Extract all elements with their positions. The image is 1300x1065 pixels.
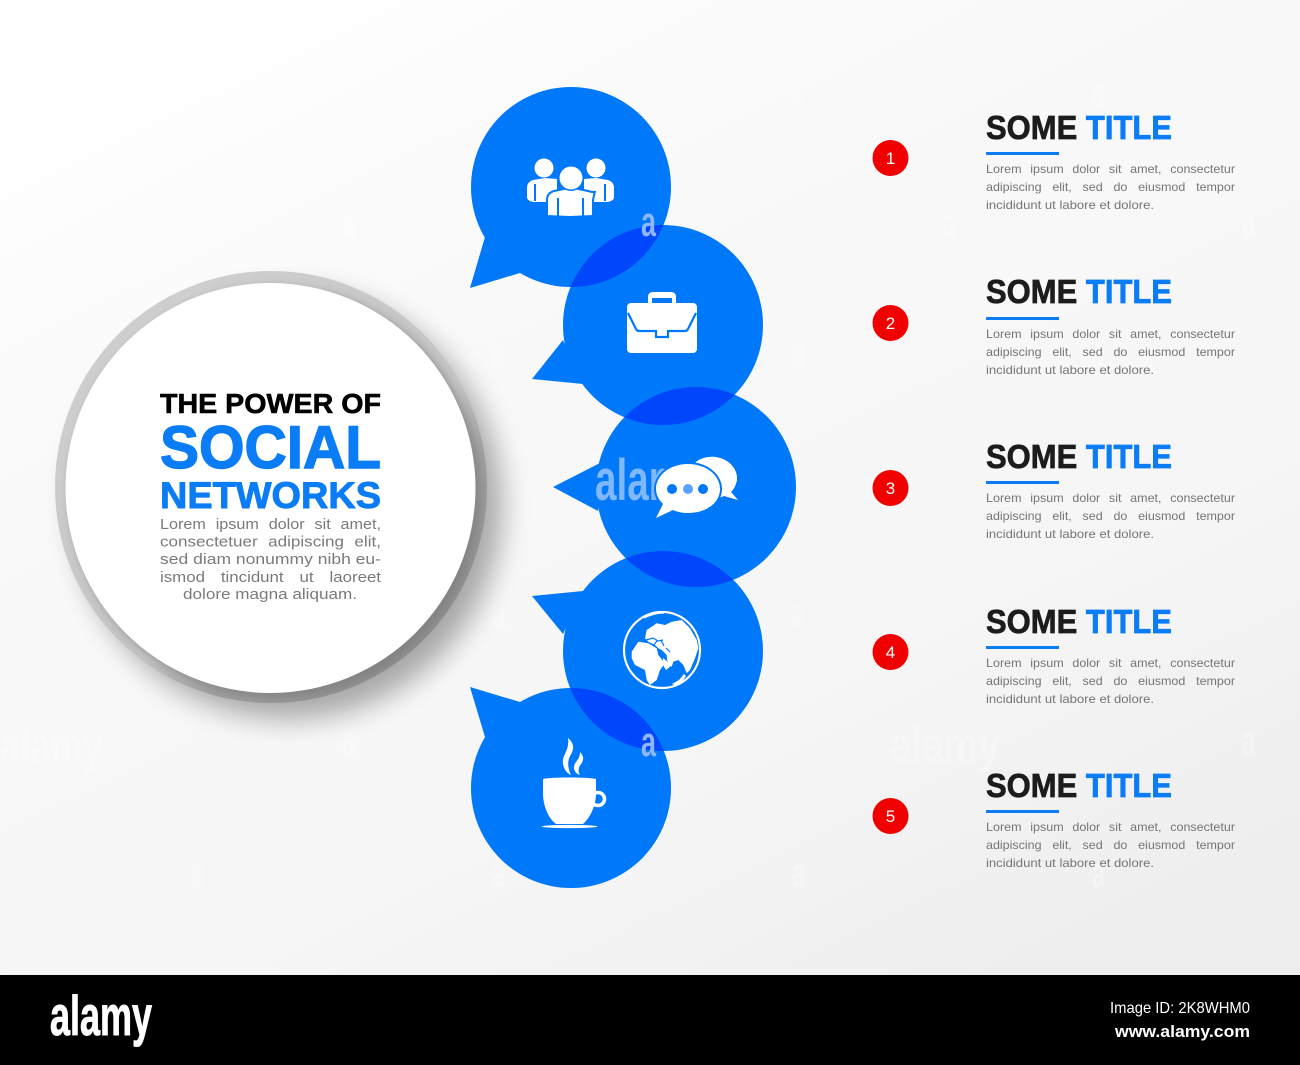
step 3 text block — [986, 438, 1235, 541]
bubble 2 — [532, 225, 763, 425]
description text: dolore magna aliquam. — [183, 586, 357, 603]
faint watermark marks: a — [792, 329, 805, 376]
step 1 text block: incididunt ut labore et dolore. — [986, 198, 1154, 212]
step 3 text block: SOME TITLE — [986, 438, 1172, 475]
step 4 text block: adipiscing elit, sed do eiusmod tempor — [986, 674, 1235, 688]
footer logo: alamy — [50, 984, 152, 1047]
panel: central circle — [55, 271, 502, 719]
heading: the power of: THE POWER OF — [160, 388, 381, 419]
faint watermark marks: a — [942, 199, 955, 246]
watermark letters on bubbles — [595, 198, 683, 765]
step 1 text block: Lorem ipsum dolor sit amet, consectetur — [986, 162, 1235, 176]
faint watermark marks: a — [342, 199, 355, 246]
bubble 4 — [532, 551, 763, 751]
watermark letters on bubbles: alam — [595, 448, 683, 513]
watermark letters on bubbles: a — [641, 718, 656, 765]
heading: social: SOCIAL — [160, 414, 381, 481]
bubble 3 — [553, 387, 796, 587]
step 5 text block: Lorem ipsum dolor sit amet, consectetur — [986, 820, 1235, 834]
faint watermark marks: a — [492, 329, 505, 376]
faint watermark marks: a — [492, 849, 505, 896]
heading: networks: NETWORKS — [160, 475, 381, 516]
faint watermark marks: a — [792, 69, 805, 116]
step 5 text block: adipiscing elit, sed do eiusmod tempor — [986, 838, 1235, 852]
step 3 text block: Lorem ipsum dolor sit amet, consectetur — [986, 491, 1235, 505]
website: www.alamy.com — [1114, 1022, 1250, 1041]
description text — [160, 516, 382, 603]
bubble 1 — [470, 87, 671, 288]
step 4 text block — [986, 603, 1235, 706]
step 5 number badge: 5 — [886, 807, 895, 826]
faint watermark marks: a — [1092, 589, 1105, 636]
circle soft shadow — [74, 291, 502, 719]
faint watermark marks: a — [342, 717, 355, 764]
step 2 text block: adipiscing elit, sed do eiusmod tempor — [986, 345, 1235, 359]
circle inner shadow on ring — [69, 286, 481, 698]
step 5 number badge — [872, 798, 908, 834]
step 1 number badge — [872, 140, 908, 176]
description text: ismod tincidunt ut laoreet — [160, 569, 382, 586]
icon: people — [527, 158, 614, 217]
step 1 text block: adipiscing elit, sed do eiusmod tempor — [986, 180, 1235, 194]
faint watermark marks: a — [492, 589, 505, 636]
circle outer ring — [55, 271, 487, 703]
footer bar — [0, 975, 1300, 1065]
image id: Image ID: 2K8WHM0 — [1110, 1000, 1250, 1017]
step 4 text block: Lorem ipsum dolor sit amet, consectetur — [986, 656, 1235, 670]
faint watermark marks: a — [192, 849, 205, 896]
watermark letters on bubbles: a — [641, 198, 656, 245]
faint watermark marks: a — [1092, 849, 1105, 896]
step 2 number badge: 2 — [886, 314, 895, 333]
step 5 text block: SOME TITLE — [986, 767, 1172, 804]
step 2 text block: SOME TITLE — [986, 273, 1172, 310]
step 2 text block — [986, 273, 1235, 377]
step 4 text block: incididunt ut labore et dolore. — [986, 692, 1154, 706]
step 2 text block: Lorem ipsum dolor sit amet, consectetur — [986, 327, 1235, 341]
bubble overlaps — [570, 225, 735, 751]
step 3 number badge: 3 — [886, 479, 895, 498]
faint watermark marks: alamy — [890, 717, 1000, 773]
step 3 text block: adipiscing elit, sed do eiusmod tempor — [986, 509, 1235, 523]
step 3 text block: incididunt ut labore et dolore. — [986, 527, 1154, 541]
step 4 text block: SOME TITLE — [986, 603, 1172, 640]
step 4 number badge — [872, 634, 908, 670]
step 5 text block: incididunt ut labore et dolore. — [986, 856, 1154, 870]
step 5 text block — [986, 767, 1235, 870]
step 4 number badge: 4 — [886, 643, 895, 662]
icon: globe — [624, 612, 700, 688]
step 1 number badge: 1 — [886, 149, 895, 168]
circle white face — [66, 283, 476, 693]
step 1 text block — [986, 109, 1235, 212]
step 2 text block: incididunt ut labore et dolore. — [986, 363, 1154, 377]
step 1 text block: SOME TITLE — [986, 109, 1172, 146]
description text: sed diam nonummy nibh eu- — [160, 551, 381, 568]
icon: coffee cup — [542, 738, 604, 828]
faint watermark marks: a — [1242, 199, 1255, 246]
faint watermark marks: a — [1092, 329, 1105, 376]
description text: consectetuer adipiscing elit, — [160, 534, 381, 550]
bubble 5 — [470, 687, 671, 888]
step 2 number badge — [872, 305, 908, 341]
faint watermark marks: a — [792, 849, 805, 896]
step 3 number badge — [872, 470, 908, 506]
faint watermark marks: a — [792, 589, 805, 636]
icon: chat bubbles — [654, 457, 738, 518]
icon: briefcase — [627, 292, 697, 353]
description text: Lorem ipsum dolor sit amet, — [160, 516, 381, 533]
faint watermark marks: a — [1242, 717, 1255, 764]
faint watermark marks: alamy — [0, 717, 103, 773]
faint watermark marks: a — [1092, 69, 1105, 116]
faint watermark marks — [0, 69, 1255, 896]
